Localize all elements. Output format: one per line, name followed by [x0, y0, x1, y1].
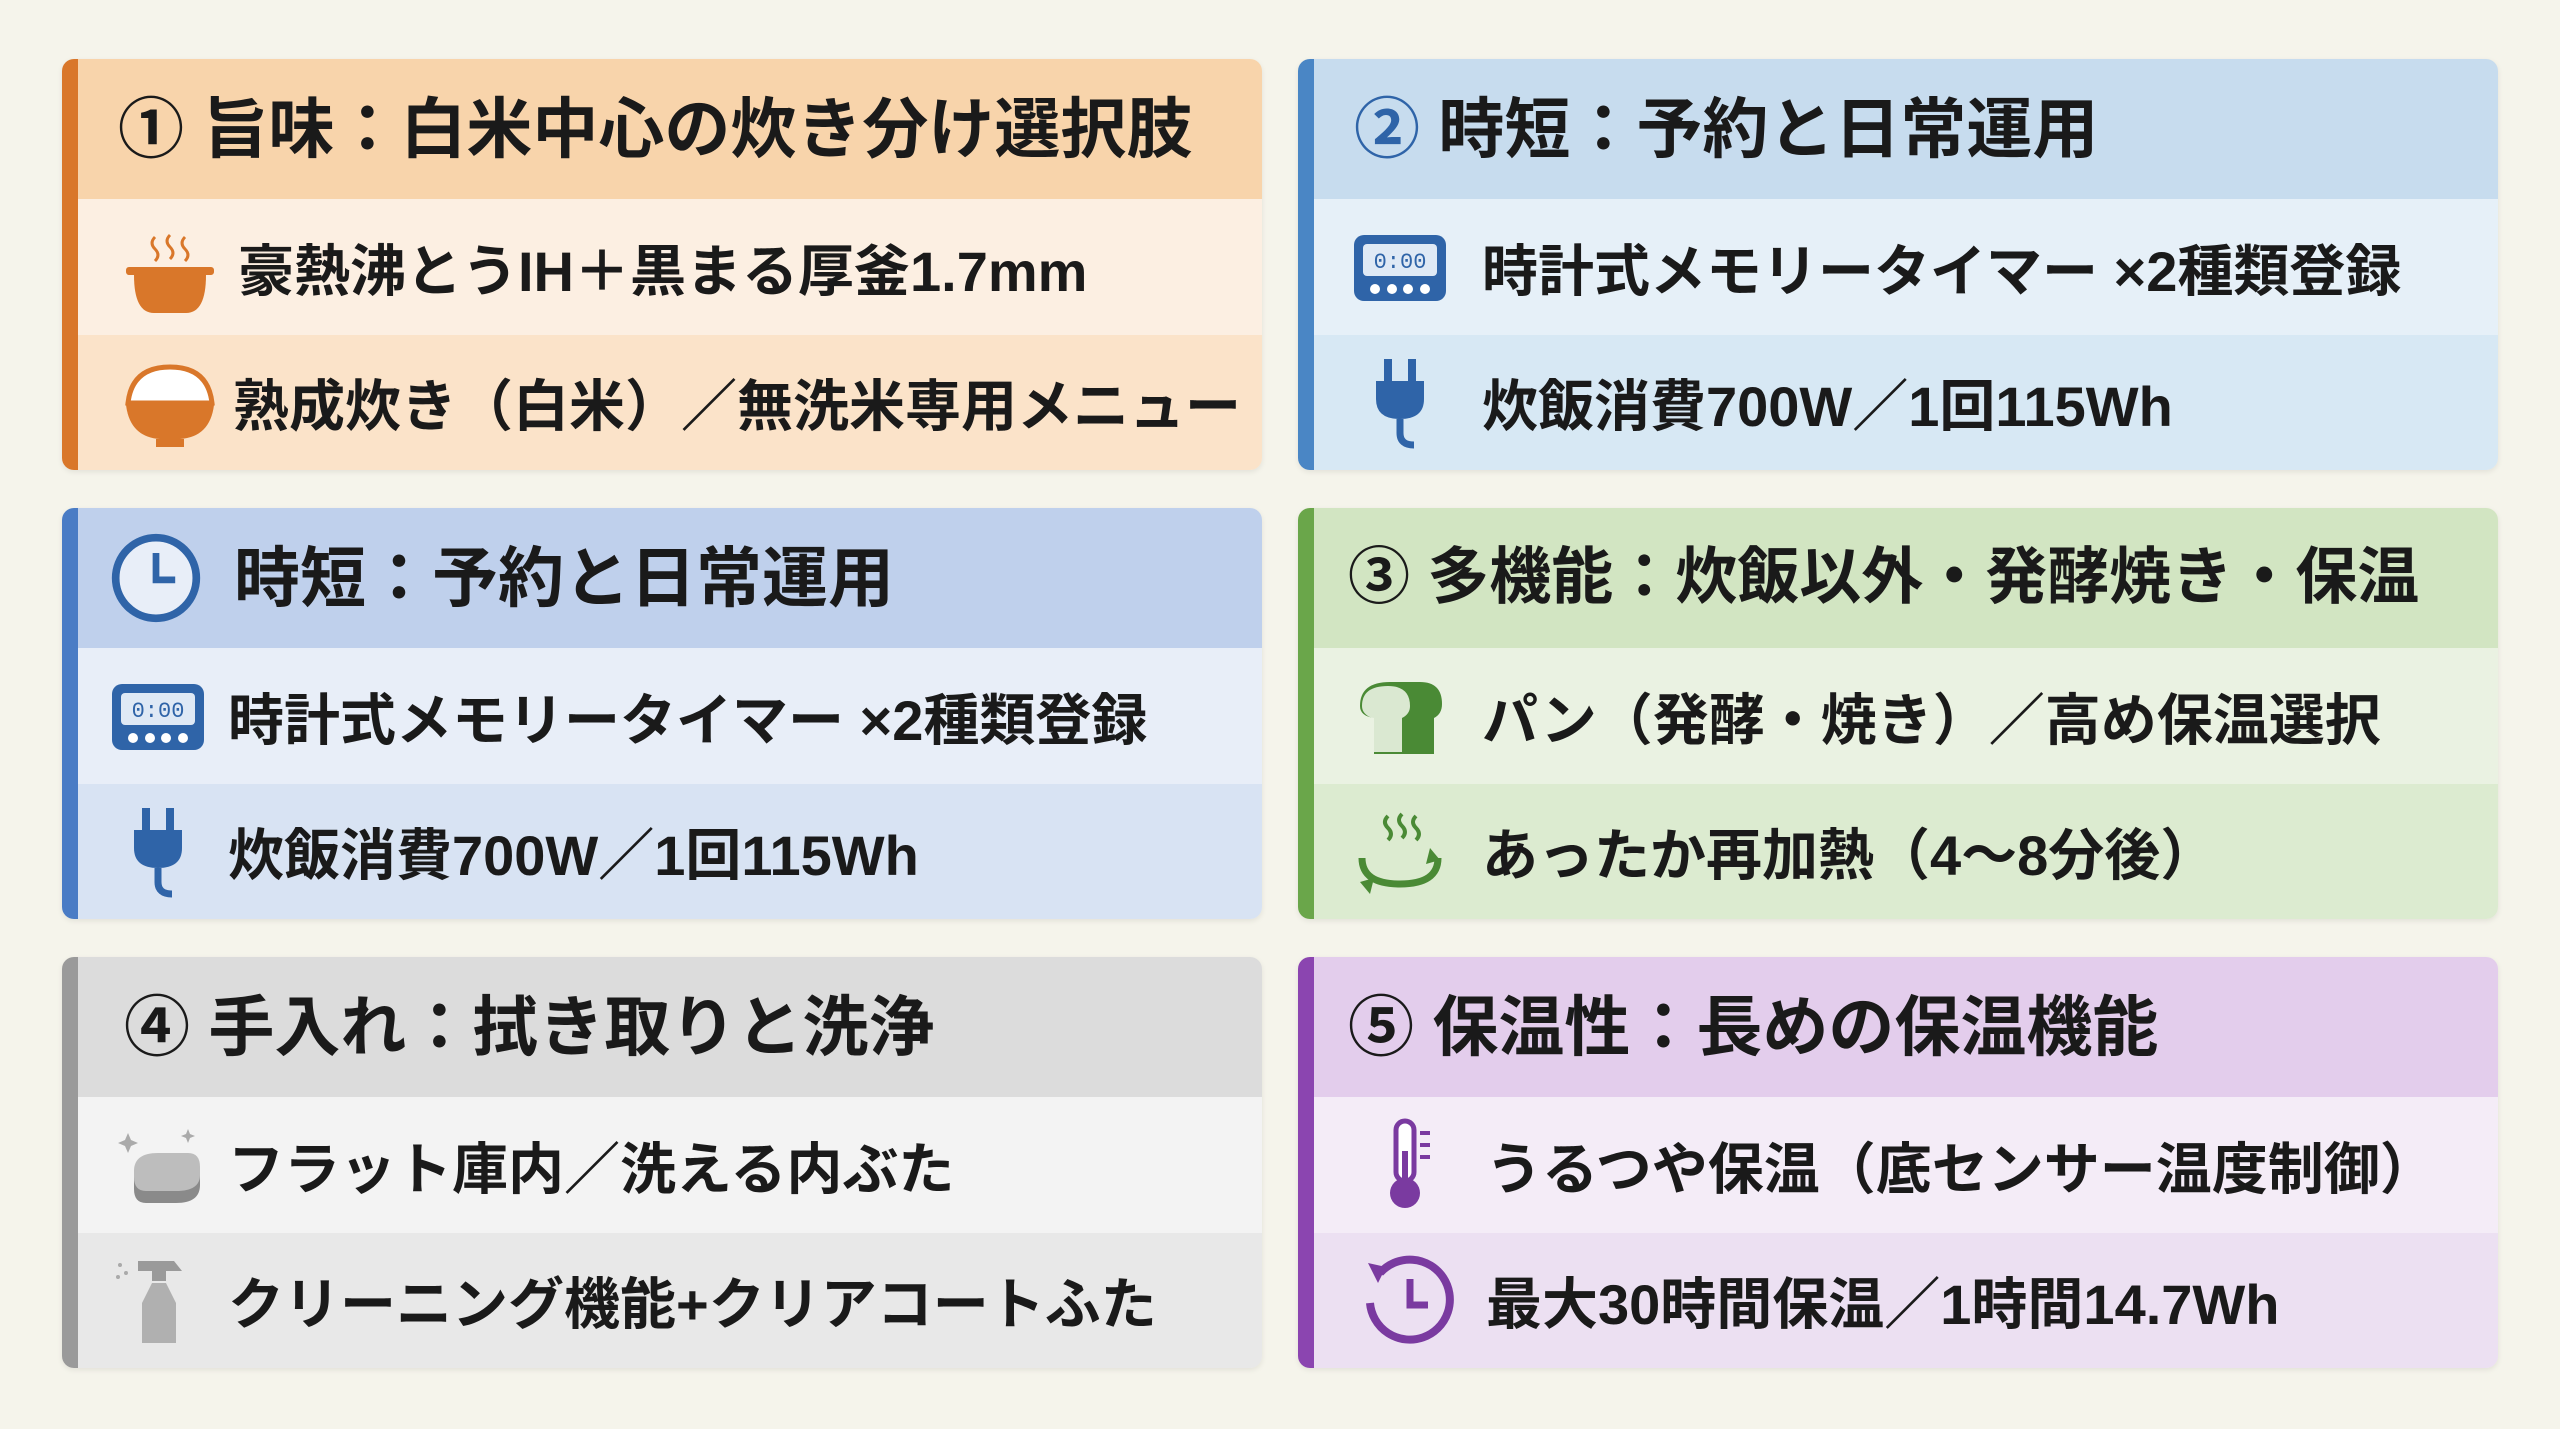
icon: digital timer [112, 684, 204, 750]
heading: keep warm [1314, 957, 2498, 1097]
item: timer: 時計式メモリータイマー ×2種類登録 [228, 688, 1147, 752]
icon: clock [112, 534, 200, 622]
heading: maintenance: ④ 手入れ：拭き取りと洗浄 [124, 990, 934, 1064]
item: power [78, 784, 1262, 919]
icon: plug [134, 808, 182, 898]
icon: steam reheat [1358, 812, 1442, 894]
icon: clock arrow [1366, 1256, 1454, 1344]
heading: multi-function: ③ 多機能：炊飯以外・発酵焼き・保温 [1348, 543, 2419, 612]
icon: digital timer: 0:00 [132, 699, 184, 724]
item: flat interior [78, 1097, 1262, 1233]
item: timer: 時計式メモリータイマー ×2種類登録 [1482, 240, 2401, 302]
panel: 5 keep warm [1298, 957, 2498, 1368]
item: cleaning: クリーニング機能+クリアコートふた [228, 1273, 1157, 1336]
heading: umami [78, 59, 1262, 199]
item: timer [1314, 199, 2498, 335]
item: rice menu: 熟成炊き（白米）／無洗米専用メニュー [233, 375, 1241, 438]
item: cleaning [78, 1233, 1262, 1368]
item: bread: パン（発酵・焼き）／高め保温選択 [1482, 688, 2381, 752]
item: bread [1314, 648, 2498, 784]
item: IH pot: 豪熱沸とうIH＋黒まる厚釜1.7mm [238, 240, 1087, 302]
item: timer [78, 648, 1262, 784]
heading: maintenance [78, 957, 1262, 1097]
panel: jitan (left) [62, 508, 1262, 919]
item: flat interior: フラット庫内／洗える内ぶた [228, 1138, 954, 1200]
icon: spray bottle [116, 1261, 182, 1343]
panel: 4 maintenance [62, 957, 1262, 1368]
heading: jitan clock [78, 508, 1262, 648]
panel: 3 multi-function [1298, 508, 2498, 919]
heading: jitan clock: 時短：予約と日常運用 [234, 541, 894, 615]
icon: thermometer [1390, 1118, 1430, 1208]
heading: jitan: ② 時短：予約と日常運用 [1354, 92, 2098, 166]
item: IH pot [78, 199, 1262, 335]
icon: digital timer: 0:00 [1374, 250, 1426, 275]
heading: jitan [1314, 59, 2498, 199]
icon: sponge [118, 1129, 200, 1203]
icon: plug [1376, 359, 1424, 448]
item: power [1314, 335, 2498, 470]
panel: 2 jitan (right) [1298, 59, 2498, 470]
item: 30 hours: 最大30時間保温／1時間14.7Wh [1486, 1273, 2280, 1336]
item: power: 炊飯消費700W／1回115Wh [228, 824, 919, 887]
item: sensor: うるつや保温（底センサー温度制御） [1486, 1138, 2436, 1200]
item: reheat [1314, 784, 2498, 919]
heading: keep warm: ⑤ 保温性：長めの保温機能 [1348, 990, 2158, 1064]
icon: rice bowl [125, 364, 215, 447]
item: power: 炊飯消費700W／1回115Wh [1482, 375, 2173, 438]
heading: umami: ① 旨味：白米中心の炊き分け選択肢 [118, 92, 1192, 166]
item: sensor [1314, 1097, 2498, 1233]
item: rice menu [78, 335, 1262, 470]
icon: steaming pot [126, 234, 214, 313]
item: reheat: あったか再加熱（4〜8分後） [1482, 824, 2216, 887]
icon: digital timer [1354, 235, 1446, 301]
heading: multi-function [1314, 508, 2498, 648]
icon: bread [1360, 682, 1442, 754]
panel: 1 umami [62, 59, 1262, 470]
item: 30 hours [1314, 1233, 2498, 1368]
